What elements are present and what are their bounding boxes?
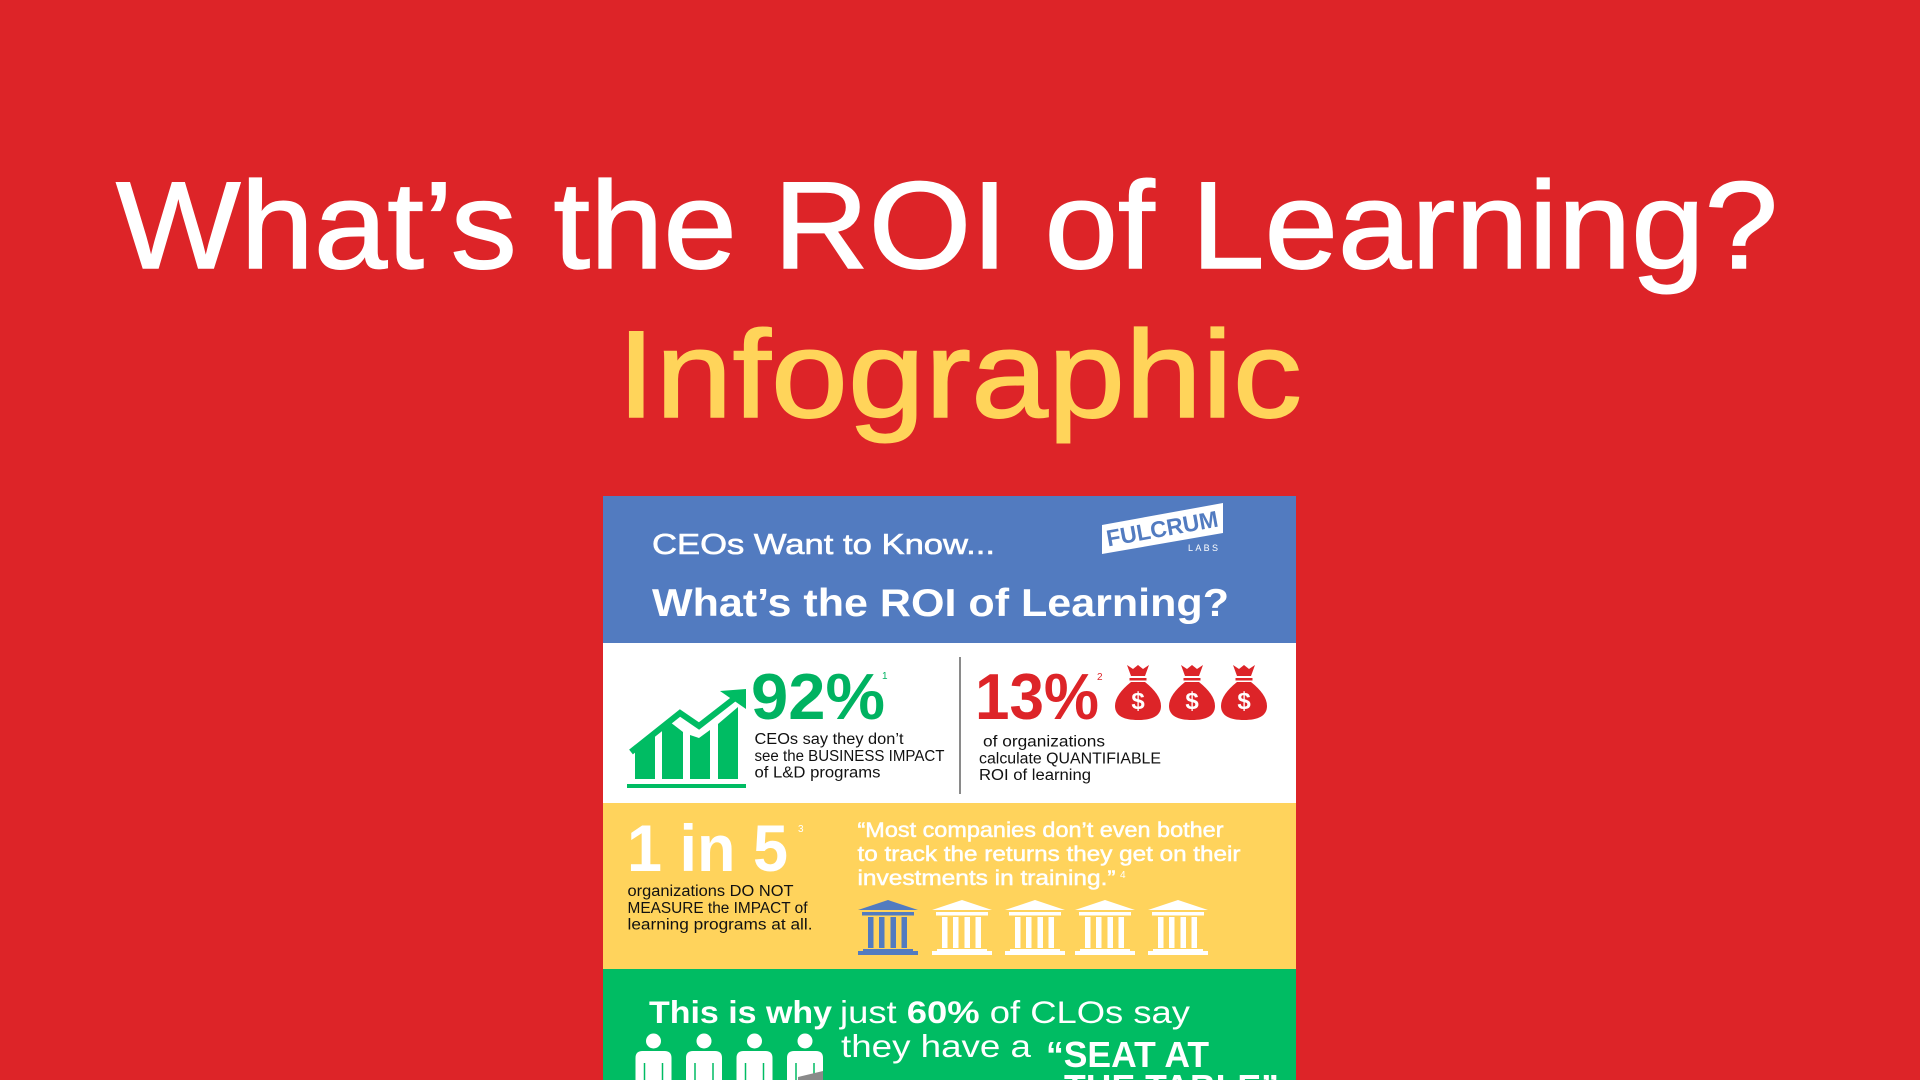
logo: Fulcrum Labs: LABS bbox=[1188, 543, 1218, 553]
panel: blue header bbox=[603, 496, 1296, 643]
icon: money bags: $ bbox=[1131, 688, 1145, 715]
header kicker: CEOs Want to Know... bbox=[652, 529, 995, 561]
stat: 92%: 92% bbox=[751, 660, 885, 733]
quote bbox=[858, 819, 1240, 890]
subtitle: Infographic: Infographic bbox=[617, 306, 1302, 444]
quote: “Most companies don’t even bother bbox=[858, 819, 1224, 842]
panel: yellow measurement bbox=[603, 803, 1296, 969]
heading: This is why: This is why bbox=[649, 994, 833, 1030]
text: of organizations: calculate QUANTIFIABLE bbox=[979, 750, 1161, 768]
footnote 3: 3 bbox=[798, 824, 804, 835]
text: CEOs say: of L&D programs bbox=[754, 764, 881, 782]
text: of organizations: ROI of learning bbox=[979, 767, 1091, 784]
text: CEOs say bbox=[754, 731, 945, 782]
text: they have a: they have a bbox=[841, 1028, 1032, 1064]
text: seat at the table: “SEAT AT bbox=[1046, 1034, 1209, 1075]
icon: people bbox=[636, 1034, 823, 1080]
text: organizations do not measure: organizations DO NOT bbox=[628, 883, 794, 900]
text: of organizations: of organizations bbox=[983, 734, 1105, 750]
icon: money bags bbox=[1115, 665, 1267, 720]
footnote 2: 2 bbox=[1097, 672, 1103, 683]
title: What’s the ROI of Learning? bbox=[116, 157, 1778, 295]
panel: green seat at the table bbox=[603, 969, 1296, 1080]
quote: 4 bbox=[1120, 870, 1126, 881]
panel: white statistics bbox=[603, 643, 1296, 803]
text: CEOs say: CEOs say they don’t bbox=[754, 731, 904, 748]
stat: 13%: 13% bbox=[975, 660, 1099, 733]
text: organizations do not measure: MEASURE the IMPACT of bbox=[628, 900, 808, 917]
icon: money bags: $ bbox=[1237, 688, 1251, 715]
stat: 1 in 5: 1 in 5 bbox=[627, 811, 788, 885]
text: just 60% of CLOs say: just 60% of CLOs say bbox=[839, 994, 1190, 1030]
quote: investments in training.” bbox=[858, 867, 1116, 890]
icon: buildings bbox=[858, 900, 1208, 955]
text: seat at the table bbox=[1046, 1034, 1279, 1080]
icon: rising bar chart with arrow bbox=[627, 689, 746, 788]
text: organizations do not measure: learning programs at all. bbox=[628, 916, 812, 934]
divider bbox=[959, 657, 961, 794]
quote: to track the returns they get on their bbox=[858, 843, 1240, 866]
text: of organizations bbox=[979, 734, 1161, 784]
footnote 1: 1 bbox=[882, 671, 888, 682]
header title: What’s the ROI of Learning? bbox=[652, 582, 1229, 625]
logo: Fulcrum Labs: FULCRUM bbox=[1104, 506, 1220, 551]
text: CEOs say: see the BUSINESS IMPACT bbox=[754, 748, 945, 765]
text: organizations do not measure bbox=[628, 883, 812, 934]
icon: money bags: $ bbox=[1185, 688, 1199, 715]
title bbox=[116, 157, 1778, 444]
